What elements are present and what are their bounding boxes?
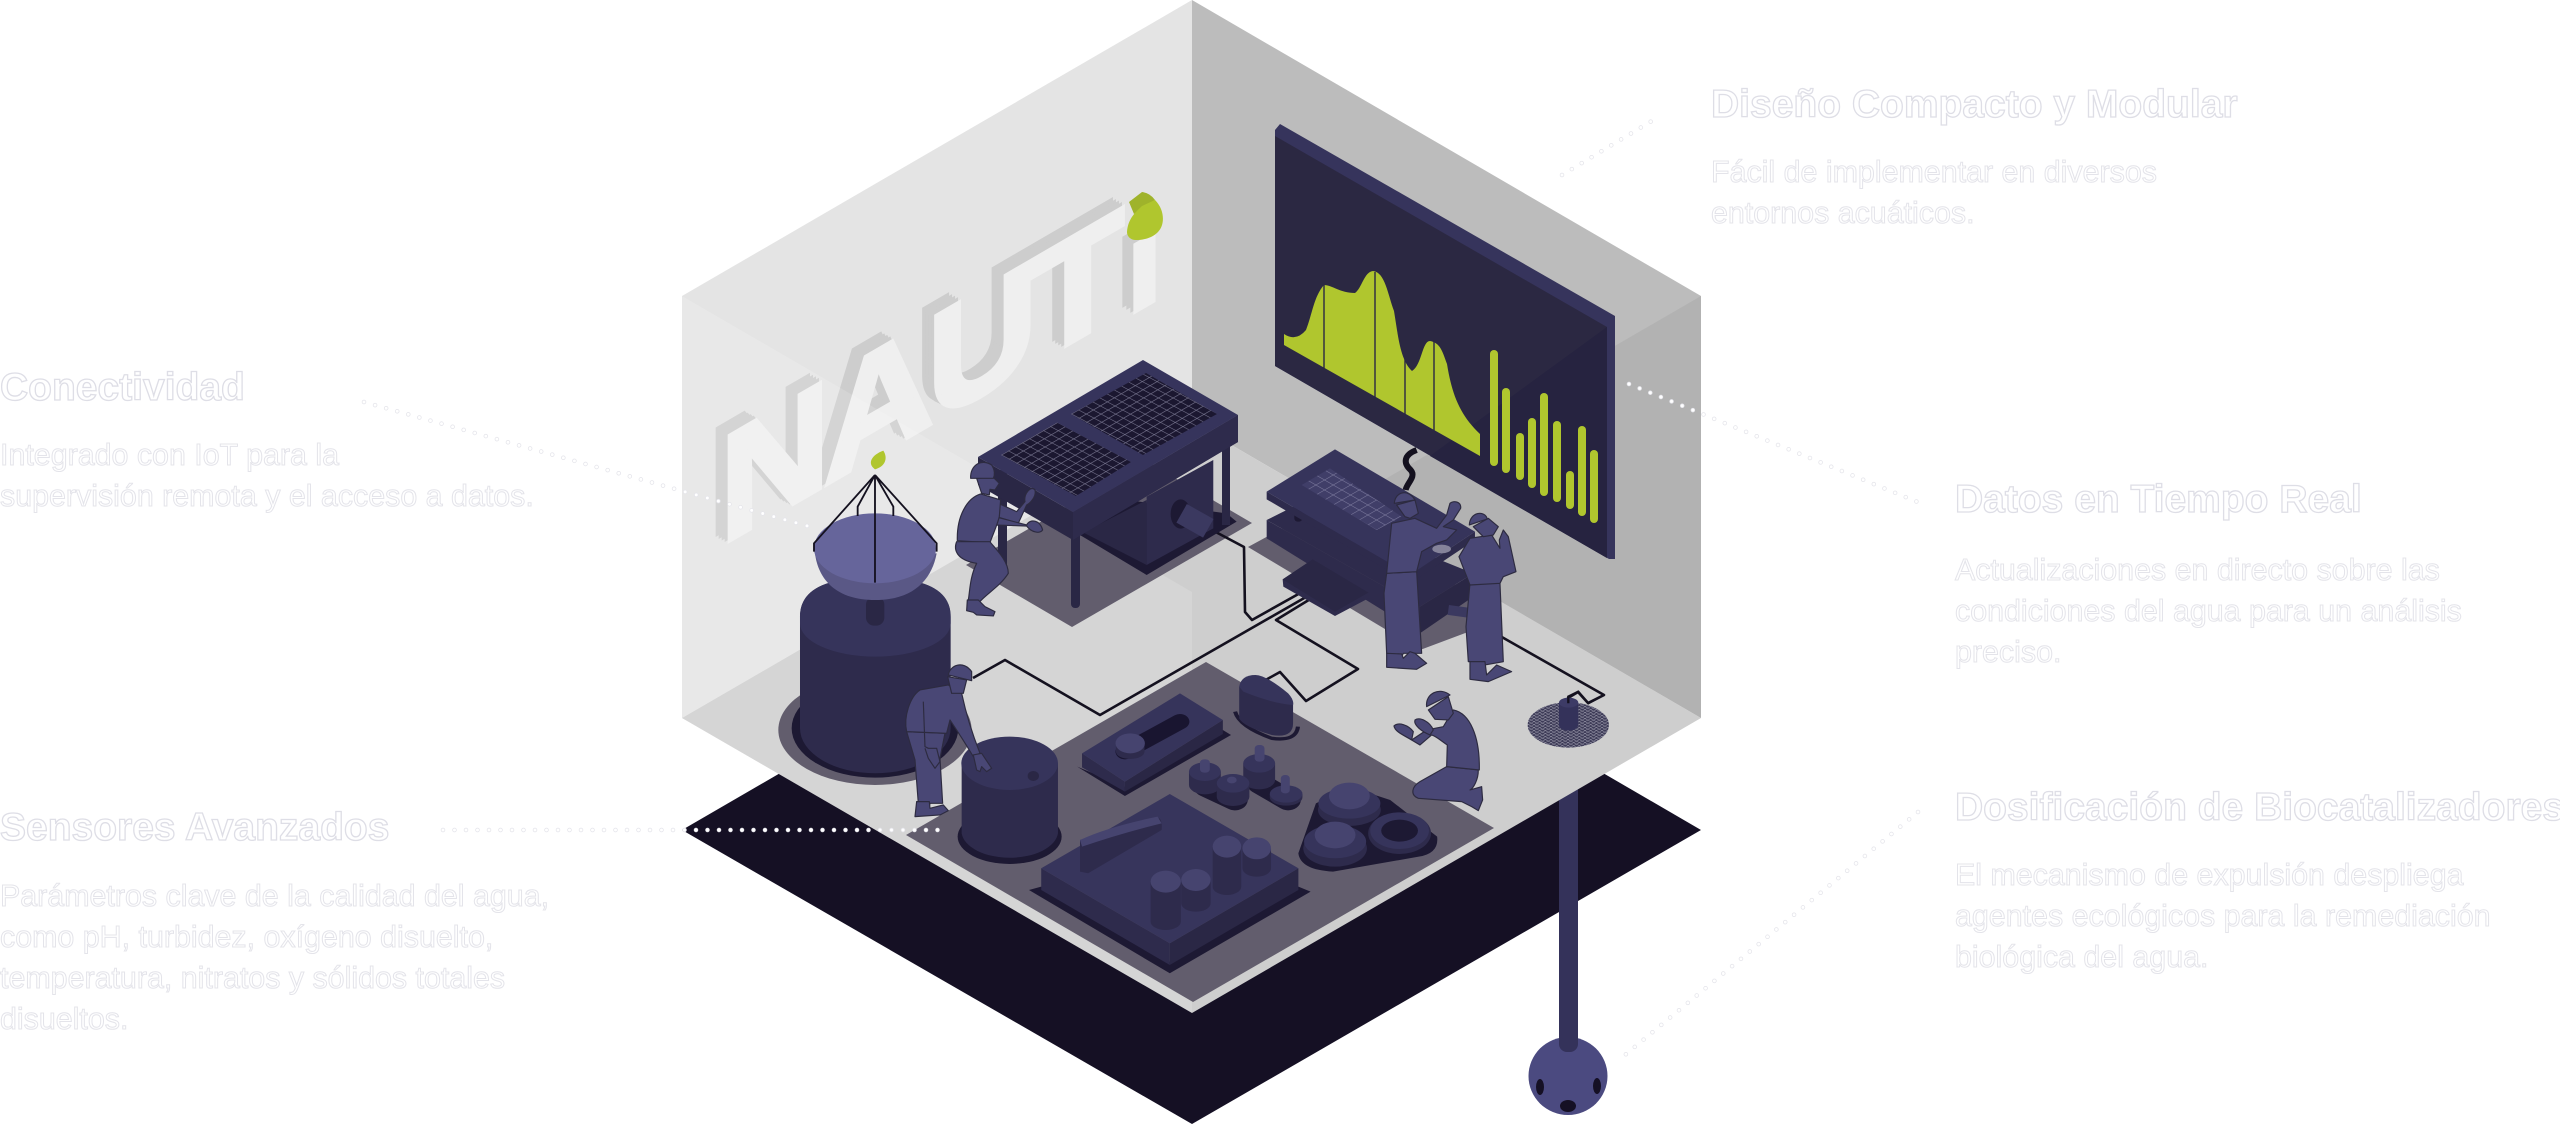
large platform <box>1029 794 1311 973</box>
worker operating device <box>1384 493 1461 669</box>
text block: datos en tiempo real: Actualizaciones en directo sobre las <box>1955 553 2440 587</box>
NAUTI wall logo: NAUT <box>720 174 1123 578</box>
probe: pole and sphere <box>1528 780 1608 1115</box>
text block: diseno compacto: Fácil de implementar en diversos <box>1711 155 2157 189</box>
big tank with bowl <box>778 451 972 785</box>
wall monitor <box>1275 124 1615 559</box>
text block: dosificacion de biocatalizadores: agentes ecológicos para la remediación <box>1955 899 2491 933</box>
NAUTI wall logo: ı <box>1116 176 1151 336</box>
NAUTI wall logo: NAUT <box>714 171 1117 575</box>
worker kneeling <box>1394 691 1483 811</box>
control device <box>1267 449 1475 633</box>
text block: dosificacion de biocatalizadores: El mecanismo de expulsión despliega <box>1955 858 2464 892</box>
leader line: conectividad <box>364 402 811 527</box>
NAUTI wall logo: NAUT <box>708 167 1111 571</box>
worker at drum <box>906 665 992 817</box>
NAUTI wall logo: NAUT <box>711 169 1114 573</box>
text block: datos en tiempo real: Datos en Tiempo Real <box>1955 478 2362 521</box>
solar table machine <box>978 360 1238 608</box>
table legs <box>998 430 1230 608</box>
bar chart <box>1494 354 1594 519</box>
text block: sensores avanzados: como pH, turbidez, oxígeno disuelto, <box>0 920 493 954</box>
machinery floor patch <box>906 662 1494 1002</box>
leader line: datos <box>1629 384 1920 503</box>
left wall <box>682 0 1192 718</box>
text block: conectividad <box>0 366 534 513</box>
slotted tray <box>1077 693 1231 796</box>
text block: conectividad: Conectividad <box>0 366 245 409</box>
dark base plate <box>682 534 1701 1124</box>
text block: datos en tiempo real: condiciones del agua para un análisis <box>1955 594 2462 628</box>
worker crouching at table <box>956 462 1043 616</box>
NAUTI wall logo: ı <box>1124 181 1159 341</box>
NAUTI wall logo: ı <box>1127 183 1162 343</box>
text block: diseno compacto: entornos acuáticos. <box>1711 196 1975 230</box>
leader line: sensores <box>443 828 942 832</box>
device tray <box>1283 559 1368 616</box>
stadium canister <box>1235 675 1298 739</box>
area chart <box>1284 271 1480 456</box>
machinery on floor patch <box>1029 675 1437 973</box>
logo leaf <box>1127 192 1163 240</box>
text block: dosificacion de biocatalizadores: Dosificación de Biocatalizadores <box>1955 786 2560 829</box>
text block: datos en tiempo real <box>1954 478 2462 669</box>
device button <box>1432 545 1451 553</box>
text block: sensores avanzados: Sensores Avanzados <box>0 806 389 849</box>
text block: sensores avanzados: Parámetros clave de la calidad del agua, <box>0 878 549 912</box>
text block: conectividad: supervisión remota y el acceso a datos. <box>0 479 534 513</box>
table floor shadow <box>966 461 1252 627</box>
text block: conectividad: Integrado con IoT para la <box>0 438 339 472</box>
solar grid right <box>1071 373 1217 455</box>
leader line: diseno <box>1562 116 1660 175</box>
mesh pad with sensor <box>1528 692 1609 748</box>
text block: diseno compacto: Diseño Compacto y Modular <box>1711 83 2238 126</box>
solar grid left <box>1001 422 1131 496</box>
cabling <box>973 530 1604 715</box>
drum <box>958 737 1062 864</box>
box machine under table <box>1080 460 1237 575</box>
text block: diseno compacto <box>1711 83 2238 230</box>
text block: sensores avanzados: temperatura, nitratos y sólidos totales <box>0 960 505 994</box>
floor <box>682 422 1701 1013</box>
front glass wash <box>682 296 1192 1013</box>
device floor shadow <box>1248 495 1500 650</box>
table top <box>978 415 1238 540</box>
leader line: dosificacion <box>1625 812 1918 1055</box>
worker standing by device <box>1459 513 1516 682</box>
device touch grid <box>1302 468 1402 530</box>
small cylinders group <box>1189 745 1302 806</box>
right wall <box>1192 0 1701 718</box>
NAUTI wall logo: NAUT <box>717 172 1120 576</box>
text block: datos en tiempo real: preciso. <box>1955 635 2061 669</box>
discs on triangular base <box>1298 783 1437 872</box>
text block: dosificacion de biocatalizadores: biológica del agua. <box>1955 940 2208 974</box>
text block: dosificacion de biocatalizadores <box>1955 786 2560 974</box>
text block: sensores avanzados: disueltos. <box>0 1002 128 1036</box>
NAUTI wall logo: ı <box>1120 178 1155 338</box>
text block: sensores avanzados <box>0 806 549 1036</box>
